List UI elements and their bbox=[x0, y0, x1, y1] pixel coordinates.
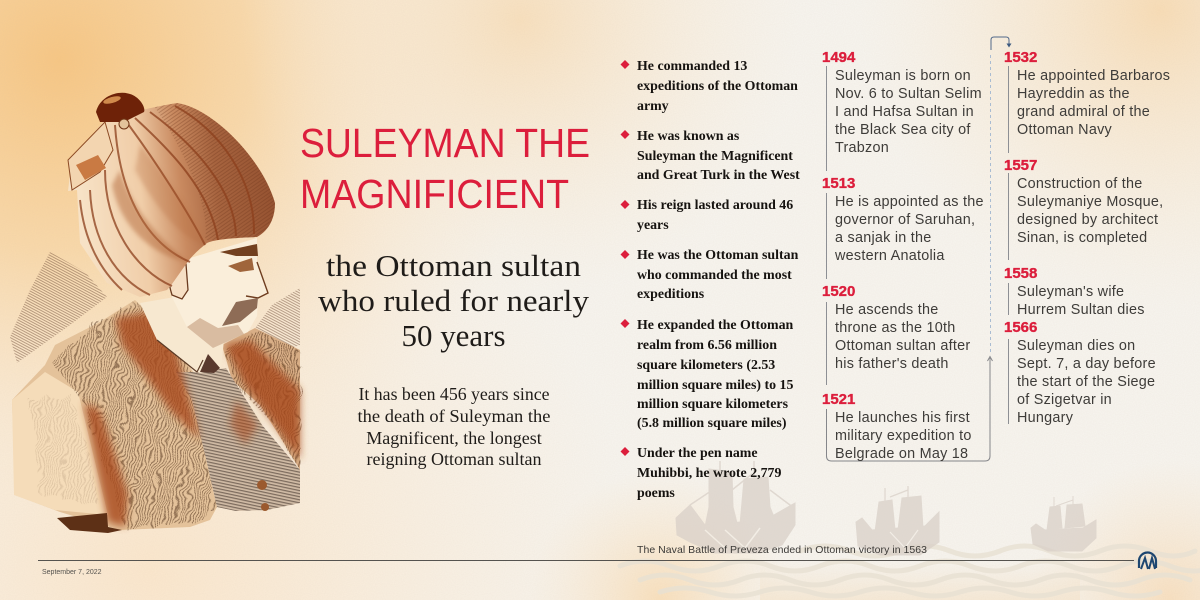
decorative waves bbox=[620, 546, 1200, 596]
event 1494: the Black Sea city of bbox=[835, 122, 971, 138]
event 1521: military expedition to bbox=[835, 428, 972, 444]
event 1558: 1558 bbox=[1004, 265, 1037, 282]
event 1532: grand admiral of the bbox=[1017, 104, 1150, 120]
title: MAGNIFICIENT bbox=[300, 171, 569, 217]
fact: known as: Suleyman the Magnificent bbox=[637, 149, 793, 164]
intro paragraph: the death of Suleyman the bbox=[358, 406, 551, 426]
intro paragraph: Magnificent, the longest bbox=[366, 428, 542, 448]
fact: reign: His reign lasted around 46 bbox=[637, 198, 793, 213]
facts list bbox=[620, 59, 800, 501]
title: SULEYMAN THE bbox=[300, 120, 590, 166]
event 1520: Ottoman sultan after bbox=[835, 338, 970, 354]
portrait: background hatching bbox=[10, 252, 300, 363]
icon: agency logo bbox=[1139, 552, 1156, 569]
event 1557: designed by architect bbox=[1017, 212, 1158, 228]
portrait: moustache bbox=[222, 298, 258, 326]
event 1532: He appointed Barbaros bbox=[1017, 68, 1170, 84]
event 1521 bbox=[822, 391, 972, 462]
portrait: vest buttons bbox=[257, 480, 269, 511]
portrait: dark fur shading bbox=[84, 312, 300, 527]
timeline connector arrow bbox=[826, 37, 1012, 461]
event 1557: Sinan, is completed bbox=[1017, 230, 1147, 246]
ship 3 bbox=[1031, 496, 1096, 551]
event 1520: throne as the 10th bbox=[835, 320, 956, 336]
event 1494: I and Hafsa Sultan in bbox=[835, 104, 974, 120]
event 1520: his father's death bbox=[835, 356, 949, 372]
fact: reign: years bbox=[637, 218, 669, 233]
ship silhouettes bbox=[676, 461, 1096, 555]
fact: realm: (5.8 million square miles) bbox=[637, 416, 787, 431]
event 1566: 1566 bbox=[1004, 319, 1037, 336]
subtitle bbox=[318, 249, 590, 353]
event 1513: governor of Saruhan, bbox=[835, 212, 975, 228]
portrait: turban knot and flap bbox=[68, 122, 113, 190]
subtitle: 50 years bbox=[402, 319, 506, 353]
event 1513: western Anatolia bbox=[834, 248, 945, 264]
fact: most expeditions bbox=[620, 248, 799, 302]
event 1513: He is appointed as the bbox=[835, 194, 984, 210]
fact: most expeditions: expeditions bbox=[637, 287, 705, 302]
event 1557: Suleymaniye Mosque, bbox=[1017, 194, 1163, 210]
subtitle: who ruled for nearly bbox=[318, 284, 590, 318]
portrait: face bbox=[169, 238, 268, 348]
event 1558 bbox=[1004, 265, 1145, 318]
fact: expeditions bbox=[620, 59, 798, 114]
event 1520 bbox=[822, 283, 970, 385]
event 1513 bbox=[822, 175, 984, 279]
intro paragraph bbox=[358, 384, 551, 469]
event 1566: the start of the Siege bbox=[1017, 374, 1155, 390]
intro paragraph: It has been 456 years since bbox=[358, 384, 550, 404]
event 1558: Suleyman's wife bbox=[1017, 284, 1124, 300]
event 1558: Hurrem Sultan dies bbox=[1017, 302, 1145, 318]
fact: poems: Under the pen name bbox=[637, 446, 758, 461]
fact: expeditions: army bbox=[637, 99, 669, 114]
footer rule bbox=[38, 560, 1134, 562]
ship caption: The Naval Battle of Preveza ended in Ottoman victory in 1563 bbox=[637, 544, 927, 556]
event 1532 bbox=[1004, 49, 1170, 153]
event 1494: Nov. 6 to Sultan Selim bbox=[835, 86, 982, 102]
event 1513: a sanjak in the bbox=[835, 230, 932, 246]
event 1521: He launches his first bbox=[835, 410, 970, 426]
ship 2 bbox=[856, 486, 939, 555]
event 1520: 1520 bbox=[822, 283, 855, 300]
event 1521: Belgrade on May 18 bbox=[835, 446, 968, 462]
timeline second column bbox=[1004, 49, 1170, 426]
event 1494: Suleyman is born on bbox=[835, 68, 971, 84]
event 1532: 1532 bbox=[1004, 49, 1037, 66]
fact: known as bbox=[620, 129, 800, 183]
portrait: waistcoat bbox=[176, 368, 300, 511]
fact: known as: and Great Turk in the West bbox=[637, 168, 800, 183]
fact: reign bbox=[620, 198, 793, 233]
fact: realm bbox=[620, 318, 794, 431]
fact: poems: Muhibbi, he wrote 2,779 bbox=[637, 466, 782, 481]
portrait: fur coat bbox=[12, 300, 300, 533]
event 1513: 1513 bbox=[822, 175, 855, 192]
fact: realm: He expanded the Ottoman bbox=[637, 318, 794, 333]
fact: realm: realm from 6.56 million bbox=[637, 338, 777, 353]
fact: most expeditions: who commanded the most bbox=[637, 268, 792, 283]
event 1557 bbox=[1004, 157, 1163, 260]
fact: known as: He was known as bbox=[637, 129, 740, 144]
fact: realm: square kilometers (2.53 bbox=[637, 358, 775, 373]
event 1566: of Szigetvar in bbox=[1017, 392, 1112, 408]
title bbox=[300, 120, 590, 217]
portrait: turban bbox=[68, 93, 280, 297]
fact: poems bbox=[620, 446, 782, 501]
portrait of Suleyman bbox=[10, 93, 300, 533]
event 1557: 1557 bbox=[1004, 157, 1037, 174]
event 1566: Suleyman dies on bbox=[1017, 338, 1135, 354]
timeline first column bbox=[822, 49, 984, 462]
event 1521: 1521 bbox=[822, 391, 855, 408]
event 1520: He ascends the bbox=[835, 302, 938, 318]
fact: poems: poems bbox=[637, 486, 675, 501]
event 1566: Sept. 7, a day before bbox=[1017, 356, 1156, 372]
event 1566 bbox=[1004, 319, 1156, 426]
fact: expeditions: He commanded 13 bbox=[637, 59, 747, 74]
event 1557: Construction of the bbox=[1017, 176, 1143, 192]
event 1532: Hayreddin as the bbox=[1017, 86, 1130, 102]
fact: realm: million square miles) to 15 bbox=[637, 378, 793, 393]
intro paragraph: reigning Ottoman sultan bbox=[367, 449, 541, 469]
event 1494: Trabzon bbox=[835, 140, 889, 156]
ship 1 bbox=[676, 461, 795, 553]
date: September 7, 2022 bbox=[42, 569, 102, 576]
event 1494 bbox=[822, 49, 982, 171]
event 1566: Hungary bbox=[1017, 410, 1074, 426]
fact: realm: million square kilometers bbox=[637, 397, 789, 412]
event 1494: 1494 bbox=[822, 49, 856, 66]
portrait: collar and neck bbox=[140, 297, 224, 373]
fact: most expeditions: He was the Ottoman sultan bbox=[637, 248, 799, 263]
subtitle: the Ottoman sultan bbox=[326, 249, 581, 283]
event 1532: Ottoman Navy bbox=[1017, 122, 1113, 138]
fact: expeditions: expeditions of the Ottoman bbox=[637, 79, 798, 94]
